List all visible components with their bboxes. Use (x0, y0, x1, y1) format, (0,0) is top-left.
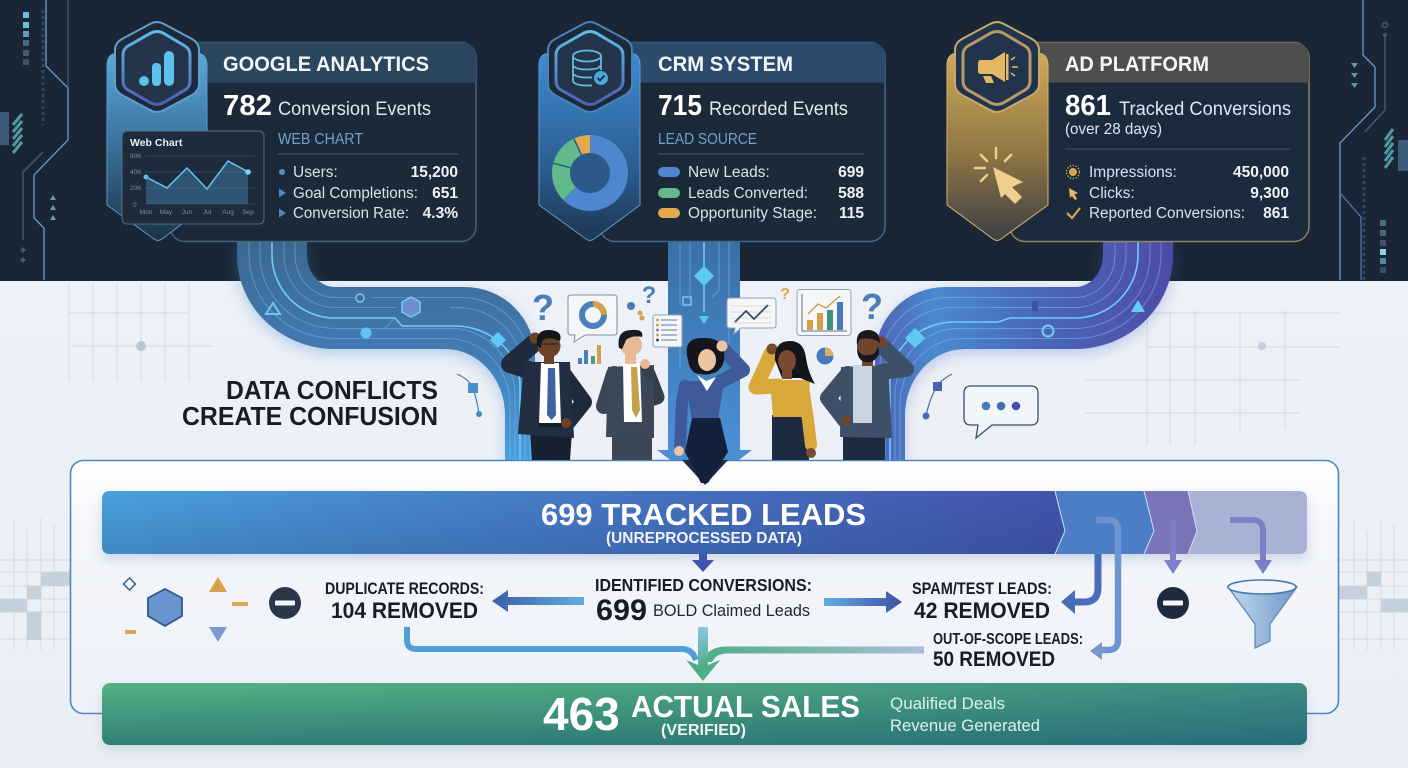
pipe node: ring (356, 294, 364, 302)
bubble with donut (568, 295, 617, 342)
banner: 463 actual sales: Qualified Deals (890, 695, 1005, 713)
arrow wings (657, 450, 752, 486)
icon: click cursor (975, 148, 1023, 204)
pipe node: diamond (490, 332, 506, 348)
banner: 463 actual sales (102, 683, 1307, 745)
decoration: right circuit traces (1340, 0, 1408, 280)
pipe node: small arrow (699, 316, 709, 324)
mini bars (578, 345, 601, 364)
person 5 (828, 330, 906, 460)
pipe node: diamond (694, 266, 714, 286)
icon: left node link (457, 374, 482, 417)
question mark 4: ? (861, 286, 883, 327)
hex badge (115, 22, 199, 112)
arrow: branch to spam (1061, 554, 1098, 614)
step: spam leads (912, 579, 1052, 623)
person 2 (604, 330, 657, 460)
card body (1010, 42, 1309, 242)
decoration: light grids (0, 285, 1408, 650)
banner: 463 actual sales: 463 (543, 688, 620, 740)
metrics list: Leads Converted: (688, 185, 808, 202)
icon: minus right (1157, 587, 1189, 619)
chart: lead source donut (553, 139, 619, 202)
web chart panel: Jul (203, 209, 212, 216)
section label: LEAD SOURCE (658, 131, 757, 148)
heading: data conflicts (182, 375, 438, 431)
accent column (947, 53, 1048, 240)
centre data pipe with arrow (657, 240, 752, 486)
floating confusion icons (532, 282, 883, 364)
pipe node: triangle (1131, 300, 1145, 312)
floating dots (627, 302, 644, 320)
number caption: Conversion Events (278, 99, 431, 120)
arrow: to minus (1164, 520, 1182, 574)
step: identified conversions (595, 575, 812, 627)
metrics list: 588 (838, 185, 864, 202)
arrow: to spam (824, 591, 902, 613)
pipe node: diamond (905, 328, 925, 348)
icon: analytics bars (139, 51, 174, 86)
metrics list: Users: (293, 164, 338, 181)
web chart panel: Mon (140, 209, 153, 216)
web chart panel: 20K (130, 185, 142, 192)
metrics list: Conversion Rate: (293, 205, 409, 222)
banner tail segments (1180, 491, 1307, 554)
person 3 (674, 338, 743, 483)
flow: merge into actual sales (407, 627, 924, 681)
heading: data conflicts: CREATE CONFUSION (182, 401, 438, 431)
background: dark upper section (0, 0, 1408, 281)
card body (600, 42, 885, 242)
metrics list: Reported Conversions: (1089, 205, 1245, 222)
pipe node: triangle (266, 303, 280, 314)
bar chart card (797, 290, 851, 336)
step: out-of-scope leads: 50 REMOVED (933, 648, 1055, 671)
step: out-of-scope leads (933, 631, 1083, 671)
card header band (600, 42, 885, 82)
big number: 861 (1065, 90, 1111, 122)
step: spam leads: SPAM/TEST LEADS: (912, 579, 1052, 598)
question mark 3: ? (780, 286, 790, 303)
question mark 1: ? (532, 287, 554, 328)
pipe node: bar (1032, 301, 1038, 311)
web chart panel: 0 (133, 202, 137, 209)
web chart panel (122, 131, 264, 224)
pipe node: ring (1042, 326, 1054, 336)
hex badge (548, 22, 632, 112)
bubble with trend line (727, 298, 776, 334)
web chart panel: 40K (130, 169, 142, 176)
banner: 463 actual sales: Revenue Generated (890, 717, 1040, 735)
metrics list: Impressions: (1089, 164, 1177, 181)
question mark 2: ? (642, 282, 656, 309)
heading: GOOGLE ANALYTICS (223, 53, 429, 76)
banner: 699 tracked leads: (UNREPROCESSED DATA) (606, 530, 802, 547)
accent column (539, 53, 640, 240)
metrics list: 115 (839, 205, 864, 222)
panel: funnel container (70, 460, 1338, 714)
person 1 (510, 330, 584, 460)
section label: WEB CHART (278, 131, 363, 148)
big number: 715 (658, 90, 702, 122)
card: Google Analytics (107, 22, 476, 242)
metrics list (658, 164, 864, 222)
pipe node: square (683, 297, 691, 305)
person 4 (756, 341, 816, 460)
step: identified conversions: BOLD Claimed Leads (653, 601, 810, 620)
metrics list: Opportunity Stage: (688, 205, 817, 222)
metrics list: Clicks: (1089, 185, 1135, 202)
card body (170, 42, 476, 242)
decoration: left circuit traces (0, 0, 68, 280)
card: Ad Platform (947, 22, 1309, 242)
metrics list (279, 164, 458, 222)
mini pie (816, 348, 834, 364)
web chart panel: 90K (130, 153, 142, 160)
banner: 463 actual sales: (VERIFIED) (661, 722, 746, 739)
icon: speech bubble with dots (964, 386, 1038, 438)
metrics list: 450,000 (1233, 164, 1289, 181)
heading: CRM SYSTEM (658, 53, 793, 76)
decoration: left shapes (124, 577, 248, 642)
banner: 699 tracked leads: 699 TRACKED LEADS (541, 497, 866, 532)
web chart panel: Sep (242, 209, 254, 216)
background: light lower section (0, 281, 1408, 768)
pipe node: hexagon (402, 297, 420, 317)
icon: database check (573, 50, 608, 86)
arrow: to funnel (1230, 520, 1272, 574)
step: spam leads: 42 REMOVED (914, 598, 1050, 623)
number caption: Tracked Conversions (1119, 99, 1291, 120)
banner: 463 actual sales: ACTUAL SALES (631, 689, 860, 724)
list card (653, 315, 682, 347)
icon: megaphone (978, 52, 1018, 83)
number caption: Recorded Events (709, 99, 848, 120)
pipe node: circle (360, 328, 372, 338)
icon: minus left (269, 587, 301, 619)
web chart panel: Web Chart (130, 137, 183, 149)
web chart panel: Aug (222, 209, 234, 216)
arrow: to duplicates (492, 590, 584, 612)
step: identified conversions: IDENTIFIED CONVERSIONS: (595, 575, 812, 595)
web chart panel: May (160, 209, 173, 216)
metrics list: 15,200 (411, 164, 458, 181)
card header band (1010, 42, 1309, 82)
arrow tip from pipe (682, 460, 728, 485)
step: identified conversions: 699 (596, 594, 647, 627)
metrics list: 651 (432, 185, 458, 202)
metrics list (1066, 164, 1289, 222)
metrics list: Goal Completions: (293, 185, 418, 202)
banner: 699 tracked leads (102, 491, 1307, 554)
decoration: grid blocks and nodes (0, 341, 1408, 640)
metrics list: New Leads: (688, 164, 770, 181)
step: duplicate records (325, 579, 484, 623)
big number: 782 (223, 90, 272, 122)
accent column (107, 53, 207, 240)
metrics list: 861 (1263, 205, 1289, 222)
arrow: branch to out-of-scope (1090, 520, 1118, 660)
hex badge (955, 22, 1039, 112)
card header band (170, 42, 476, 82)
metrics list: 699 (838, 164, 864, 181)
icon: right node link (922, 374, 952, 420)
period note: (over 28 days) (1065, 121, 1162, 138)
card: CRM System (539, 22, 885, 242)
left data pipe (237, 240, 535, 460)
icon: funnel (1228, 580, 1297, 648)
step: out-of-scope leads: OUT-OF-SCOPE LEADS: (933, 631, 1083, 648)
metrics list: 4.3% (423, 205, 458, 222)
heading: data conflicts: DATA CONFLICTS (226, 375, 438, 405)
step: duplicate records: 104 REMOVED (331, 598, 478, 623)
right data pipe (875, 240, 1173, 460)
metrics list: 9,300 (1250, 185, 1289, 202)
web chart panel: Jun (182, 209, 193, 216)
people: confused team (510, 330, 906, 483)
arrow: banner to identified (692, 554, 714, 572)
step: duplicate records: DUPLICATE RECORDS: (325, 579, 484, 598)
heading: AD PLATFORM (1065, 53, 1209, 76)
